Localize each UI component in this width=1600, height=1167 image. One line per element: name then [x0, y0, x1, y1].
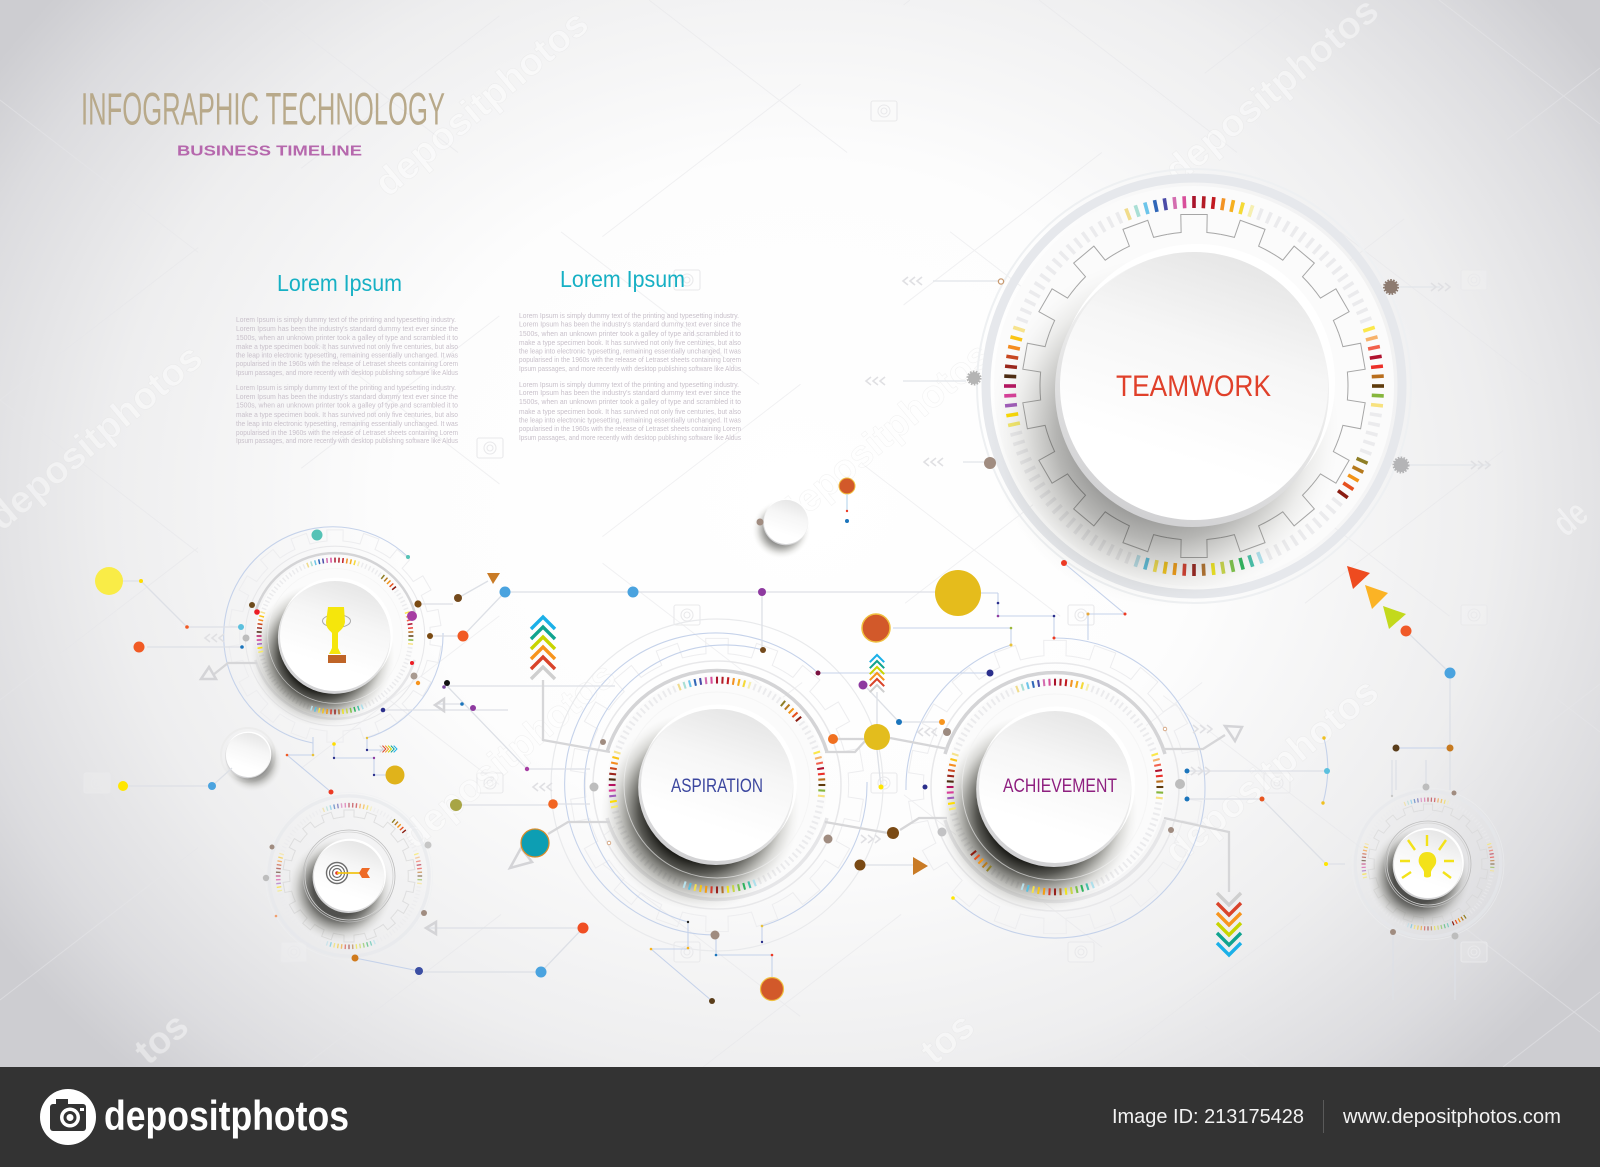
- icon: light bulb: [1400, 835, 1454, 878]
- logo: wordmark: depositphotos: [104, 1092, 349, 1139]
- triangle: orange down: [487, 573, 500, 584]
- arrow: chevron stack up: [531, 617, 555, 679]
- icon: trophy: [322, 607, 350, 663]
- dial: light bulb: [1352, 788, 1504, 940]
- text block: column one: the leap into electronic typesetting, remaining essentially unchanged. It was: [236, 350, 458, 360]
- watermark text: tos: [913, 1005, 983, 1073]
- text block: column one: make a type specimen book. It has survived not only five centuries, but also: [236, 410, 458, 419]
- text block: column two: Lorem Ipsum is simply dummy text of the printing and typesetting industry.: [519, 311, 739, 320]
- text block: column one: popularised in the 1960s with the release of Letraset sheets containing Lorem: [236, 359, 458, 368]
- watermark text: depositphotos: [367, 2, 597, 205]
- arrow: tiny chevron stack right: [380, 746, 397, 752]
- nodes: right cluster: [938, 560, 1458, 940]
- title: INFOGRAPHIC TECHNOLOGY: [81, 84, 445, 134]
- text block: column one: [236, 270, 458, 445]
- image id: Image ID: 213175428: [1112, 1106, 1304, 1128]
- text block: column two: 1500s, when an unknown printer took a galley of type and scrambled it to: [519, 397, 741, 406]
- arrow: chevron stack down: [1217, 893, 1241, 955]
- text block: column one: 1500s, when an unknown printer took a galley of type and scrambled it to: [236, 400, 458, 410]
- footer bar: [0, 1067, 1600, 1167]
- label: achievement: ACHIEVEMENT: [1003, 775, 1117, 797]
- small white circle: top: [752, 499, 810, 558]
- chevrons: grey trails: [205, 634, 1212, 843]
- text block: column two: Ipsum passages, and more recently with desktop publishing software like Aldus: [519, 433, 741, 442]
- watermark cameras: [84, 101, 1487, 962]
- watermark text: depositphotos: [769, 334, 999, 537]
- watermark text: tos: [127, 1005, 197, 1073]
- text block: column two: popularised in the 1960s with the release of Letraset sheets containing Lorem: [519, 355, 741, 364]
- column two heading: Lorem Ipsum: [560, 266, 685, 292]
- teamwork side connectors: [866, 277, 1490, 472]
- circuit lines: thin blue: [224, 527, 1450, 1001]
- text block: column two: make a type specimen book. It has survived not only five centuries, but also: [519, 338, 741, 347]
- triangles: upper right: [1347, 566, 1406, 629]
- text block: column two: Lorem Ipsum has been the industry's standard dummy text ever since the: [519, 388, 741, 397]
- text block: column one: Lorem Ipsum is simply dummy text of the printing and typesetting industry.: [236, 383, 456, 392]
- text block: column one: Lorem Ipsum is simply dummy text of the printing and typesetting industry.: [236, 315, 456, 324]
- text block: column one: Lorem Ipsum has been the industry's standard dummy text ever since the: [236, 324, 458, 333]
- label: teamwork: TEAMWORK: [1116, 370, 1271, 403]
- text block: column one: Ipsum passages, and more recently with desktop publishing software like Aldus: [236, 368, 458, 377]
- circuit lines: thick grey: [213, 663, 1229, 892]
- arrow: triangle outlines: [201, 667, 1242, 934]
- dial: target: [265, 792, 433, 960]
- text block: column one: the leap into electronic typesetting, remaining essentially unchanged. It was: [236, 419, 458, 428]
- text block: column two: Ipsum passages, and more recently with desktop publishing software like Aldus: [519, 364, 741, 373]
- dial: teamwork: [977, 169, 1411, 607]
- label: aspiration: ASPIRATION: [671, 775, 763, 797]
- logo: camera badge: [40, 1089, 96, 1145]
- text block: column one: 1500s, when an unknown printer took a galley of type and scrambled it to: [236, 333, 458, 342]
- watermark text: depositphotos: [1157, 670, 1387, 873]
- text block: column one: popularised in the 1960s with the release of Letraset sheets containing Lorem: [236, 428, 458, 437]
- triangle: orange right: [913, 857, 928, 875]
- nodes: left cluster: [95, 530, 529, 975]
- text block: column two: Lorem Ipsum is simply dummy text of the printing and typesetting industry.: [519, 380, 739, 389]
- text block: column one: make a type specimen book. It has survived not only five centuries, but also: [236, 342, 458, 351]
- subtitle: BUSINESS TIMELINE: [177, 142, 362, 160]
- text block: column two: [519, 266, 741, 442]
- dial: achievement: [907, 640, 1203, 934]
- circuit lines: thin grey: [123, 581, 1455, 1000]
- watermark text: depositphotos: [394, 654, 624, 857]
- text block: column two: popularised in the 1960s with the release of Letraset sheets containing Lorem: [519, 424, 741, 433]
- dial: trophy: [228, 530, 442, 742]
- text block: column one: Ipsum passages, and more recently with desktop publishing software like Aldus: [236, 436, 458, 445]
- text block: column two: the leap into electronic typesetting, remaining essentially unchanged. It was: [519, 416, 741, 424]
- arrow: mini chevron stack up: [870, 655, 884, 692]
- small white circle: left: [221, 728, 282, 791]
- text block: column two: Lorem Ipsum has been the industry's standard dummy text ever since the: [519, 320, 741, 328]
- website: www.depositphotos.com: [1342, 1106, 1561, 1128]
- text block: column two: the leap into electronic typesetting, remaining essentially unchanged. It was: [519, 346, 741, 356]
- nodes: centre cluster: [521, 478, 981, 1004]
- text block: column two: 1500s, when an unknown printer took a galley of type and scrambled it to: [519, 329, 741, 338]
- text block: column two: make a type specimen book. It has survived not only five centuries, but also: [519, 407, 741, 416]
- text block: column one: Lorem Ipsum has been the industry's standard dummy text ever since the: [236, 392, 458, 401]
- column one heading: Lorem Ipsum: [277, 270, 402, 296]
- icon: target with arrow: [326, 862, 370, 884]
- dial: aspiration: [551, 619, 883, 951]
